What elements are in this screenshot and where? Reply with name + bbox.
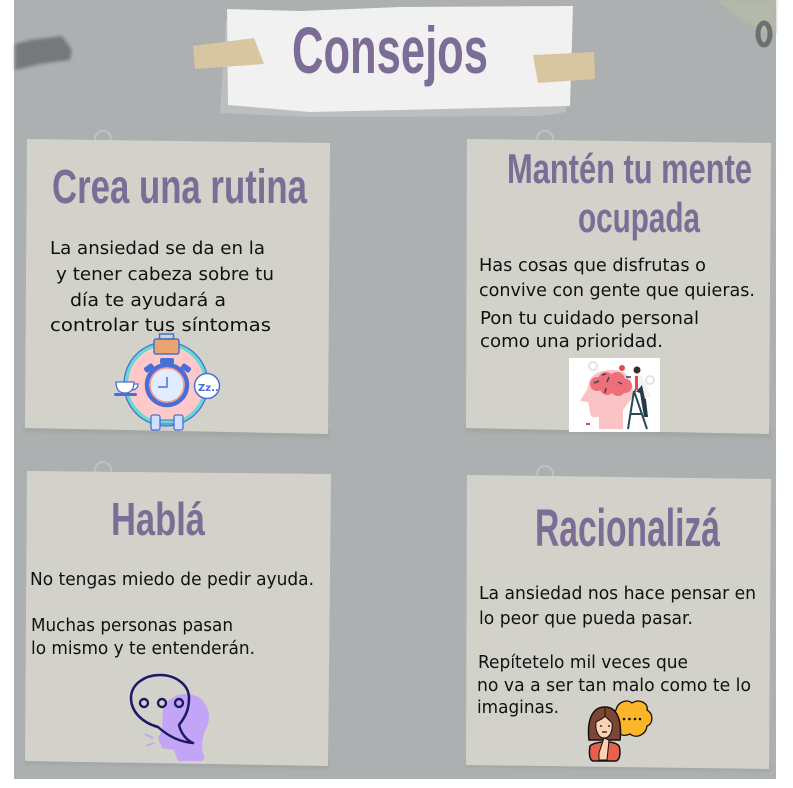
icon: speaking head <box>131 675 209 761</box>
body text <box>50 238 274 336</box>
body text <box>477 583 756 718</box>
panel: Crea una rutina <box>24 131 330 438</box>
body text: Repítetelo mil veces que <box>478 652 688 673</box>
body text: imaginas. <box>477 697 559 718</box>
heading <box>507 145 752 241</box>
title text: Consejos <box>292 13 488 87</box>
panel: Mantén tu mente ocupada <box>465 131 771 438</box>
icon: head with brain and ladder <box>569 358 660 432</box>
body text: La ansiedad nos hace pensar en <box>479 583 756 604</box>
icon: stopwatch routine: Zz.. <box>198 383 219 394</box>
body text: Pon tu cuidado personal <box>480 308 699 329</box>
icon: thinking woman <box>589 701 652 761</box>
body text: Has cosas que disfrutas o <box>479 255 706 276</box>
heading: ocupada <box>578 194 700 241</box>
body text <box>479 255 755 352</box>
title note <box>193 6 595 117</box>
charcoal smudge <box>15 36 72 70</box>
body text: como una prioridad. <box>480 331 663 352</box>
body text: día te ayudará a <box>70 290 226 311</box>
body text: convive con gente que quieras. <box>479 280 755 301</box>
heading: Hablá <box>111 493 205 545</box>
body text: Muchas personas pasan <box>31 615 233 636</box>
body text: La ansiedad se da en la <box>50 238 265 259</box>
icon: stopwatch routine <box>114 334 220 430</box>
panel: Hablá <box>24 462 331 769</box>
body text: y tener cabeza sobre tu <box>56 264 274 285</box>
tape right <box>533 52 595 83</box>
body text: no va a ser tan malo como te lo <box>477 675 751 696</box>
corner decoration <box>716 0 776 45</box>
body text: lo peor que pueda pasar. <box>479 608 693 629</box>
body text: controlar tus síntomas <box>50 315 271 336</box>
tape left <box>193 38 264 69</box>
heading: Crea una rutina <box>52 161 307 214</box>
panel: Racionalizá <box>465 466 771 771</box>
body text: lo mismo y te entenderán. <box>31 638 255 659</box>
body text <box>30 569 314 659</box>
body text: No tengas miedo de pedir ayuda. <box>30 569 314 590</box>
